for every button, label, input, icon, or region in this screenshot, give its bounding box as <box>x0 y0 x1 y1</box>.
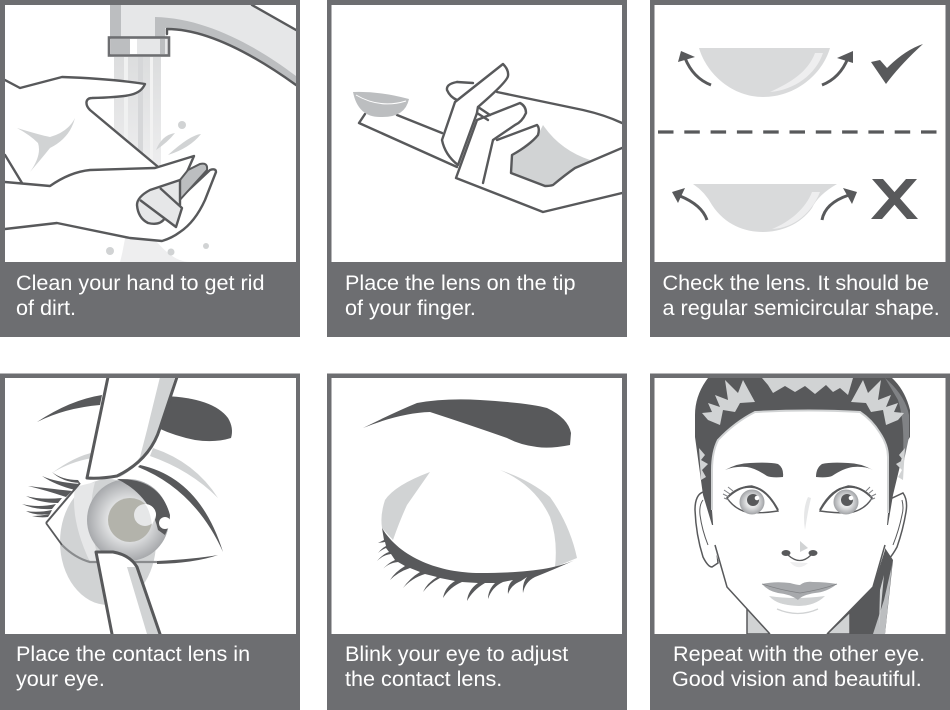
icon: eye <box>46 465 223 566</box>
icon: cross mark <box>871 179 918 219</box>
upper lid crease <box>52 448 218 498</box>
lips <box>762 582 837 614</box>
caption: a regular semicircular shape. <box>662 295 940 320</box>
eyes <box>723 486 876 514</box>
caption: Check the lens. It should be <box>662 270 929 295</box>
panel: blink <box>327 374 627 710</box>
caption: Repeat with the other eye. <box>673 641 925 666</box>
caption: Clean your hand to get rid <box>16 270 264 295</box>
icon: faucet <box>109 5 296 85</box>
caption: the contact lens. <box>345 666 502 691</box>
caption: Good vision and beautiful. <box>672 666 922 691</box>
caption: Place the lens on the tip <box>345 270 576 295</box>
panel: repeat with other eye <box>650 374 950 710</box>
caption: Place the contact lens in <box>16 641 250 666</box>
eyebrow <box>363 399 571 448</box>
eyelashes <box>377 528 577 601</box>
illustration: eye with fingers <box>22 377 232 634</box>
icon: upper hand <box>5 76 158 182</box>
ponytail <box>850 548 893 634</box>
panel: place lens in eye <box>0 374 300 710</box>
hair <box>695 378 910 634</box>
eyelashes <box>22 472 80 517</box>
water stream <box>106 57 209 262</box>
hair highlights <box>699 378 905 480</box>
illustration: faucet and washing hands <box>0 5 296 262</box>
caption: of your finger. <box>345 295 476 320</box>
caption: of dirt. <box>16 295 76 320</box>
icon: lower hand <box>0 156 216 241</box>
dashed divider <box>658 130 937 134</box>
illustration: closed eye <box>363 399 577 601</box>
panel: check the lens <box>650 0 950 337</box>
illustration: woman's face <box>695 378 910 634</box>
panel: place lens on finger <box>327 0 627 337</box>
arrow: left up <box>678 51 711 85</box>
contact lens shadow <box>60 479 156 605</box>
finger: bottom <box>96 552 160 634</box>
icon: contact lens <box>353 92 409 117</box>
icon: hand outline <box>359 64 622 212</box>
illustration: lens check <box>658 44 937 232</box>
icon: deformed lens <box>693 184 837 232</box>
face <box>712 410 888 634</box>
icon: correct lens <box>699 48 830 97</box>
neck <box>747 605 850 634</box>
arrow: right up <box>822 51 853 85</box>
panel: clean your hand <box>0 0 300 337</box>
eyelid crescent: left <box>381 472 430 540</box>
palm shading <box>511 125 590 186</box>
nose <box>782 497 818 567</box>
arrow: left up <box>672 188 707 220</box>
arrow: right up <box>822 188 857 220</box>
eyebrows <box>725 463 873 477</box>
icon: check mark <box>871 44 923 84</box>
illustration: hand with lens <box>353 64 622 212</box>
eyebrow <box>37 395 232 441</box>
eyelid crescent: right <box>500 470 577 567</box>
caption: Blink your eye to adjust <box>345 641 568 666</box>
caption: your eye. <box>16 666 105 691</box>
ears <box>695 492 907 567</box>
finger: top <box>87 377 177 478</box>
